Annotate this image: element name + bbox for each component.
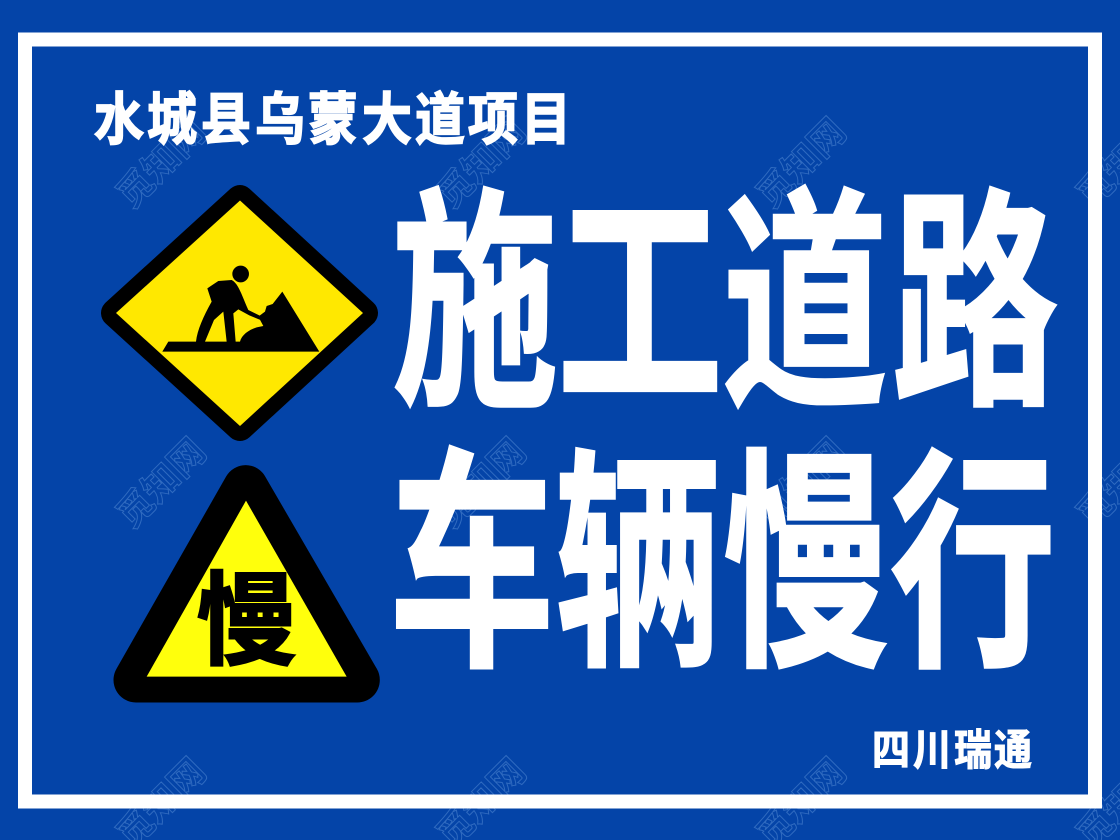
main heading: line two: 行: [890, 435, 1056, 697]
main heading: line two: [389, 435, 1056, 697]
main heading: line one: 路: [892, 174, 1058, 436]
main heading: line one: 施: [392, 174, 558, 436]
company name: [872, 726, 1032, 774]
project title: [94, 89, 571, 152]
icon: construction worker diamond sign: [115, 199, 364, 427]
project title: 县: [201, 89, 251, 152]
project title: 水: [94, 89, 144, 152]
icon: slow warning triangle sign: 慢: [197, 565, 297, 679]
company name: 通: [994, 726, 1032, 774]
project title: 蒙: [308, 89, 358, 152]
company name: 瑞: [954, 726, 992, 774]
company name: 四: [872, 726, 910, 774]
watermarks: 觅知网: [748, 110, 854, 216]
project title: 大: [362, 89, 412, 152]
main heading: line one: 道: [722, 174, 888, 436]
watermarks: 觅知网: [748, 430, 854, 536]
icon: slow warning triangle sign: [136, 488, 357, 680]
watermarks: [108, 110, 1120, 840]
main heading: line two: 慢: [723, 435, 889, 697]
project title: 乌: [255, 89, 305, 152]
main heading: line one: [392, 174, 1058, 436]
watermarks: 觅知网: [108, 110, 214, 216]
watermarks: 觅知网: [108, 430, 214, 536]
project title: 目: [521, 89, 571, 152]
main heading: line two: 辆: [555, 435, 721, 697]
project title: 城: [147, 89, 197, 152]
company name: 川: [913, 726, 951, 774]
watermarks: 觅知网: [428, 110, 534, 216]
project title: 项: [468, 89, 518, 152]
project title: 道: [415, 89, 465, 152]
main heading: line one: 工: [557, 174, 723, 436]
watermarks: 觅知网: [428, 430, 534, 536]
main heading: line two: 车: [389, 435, 555, 697]
